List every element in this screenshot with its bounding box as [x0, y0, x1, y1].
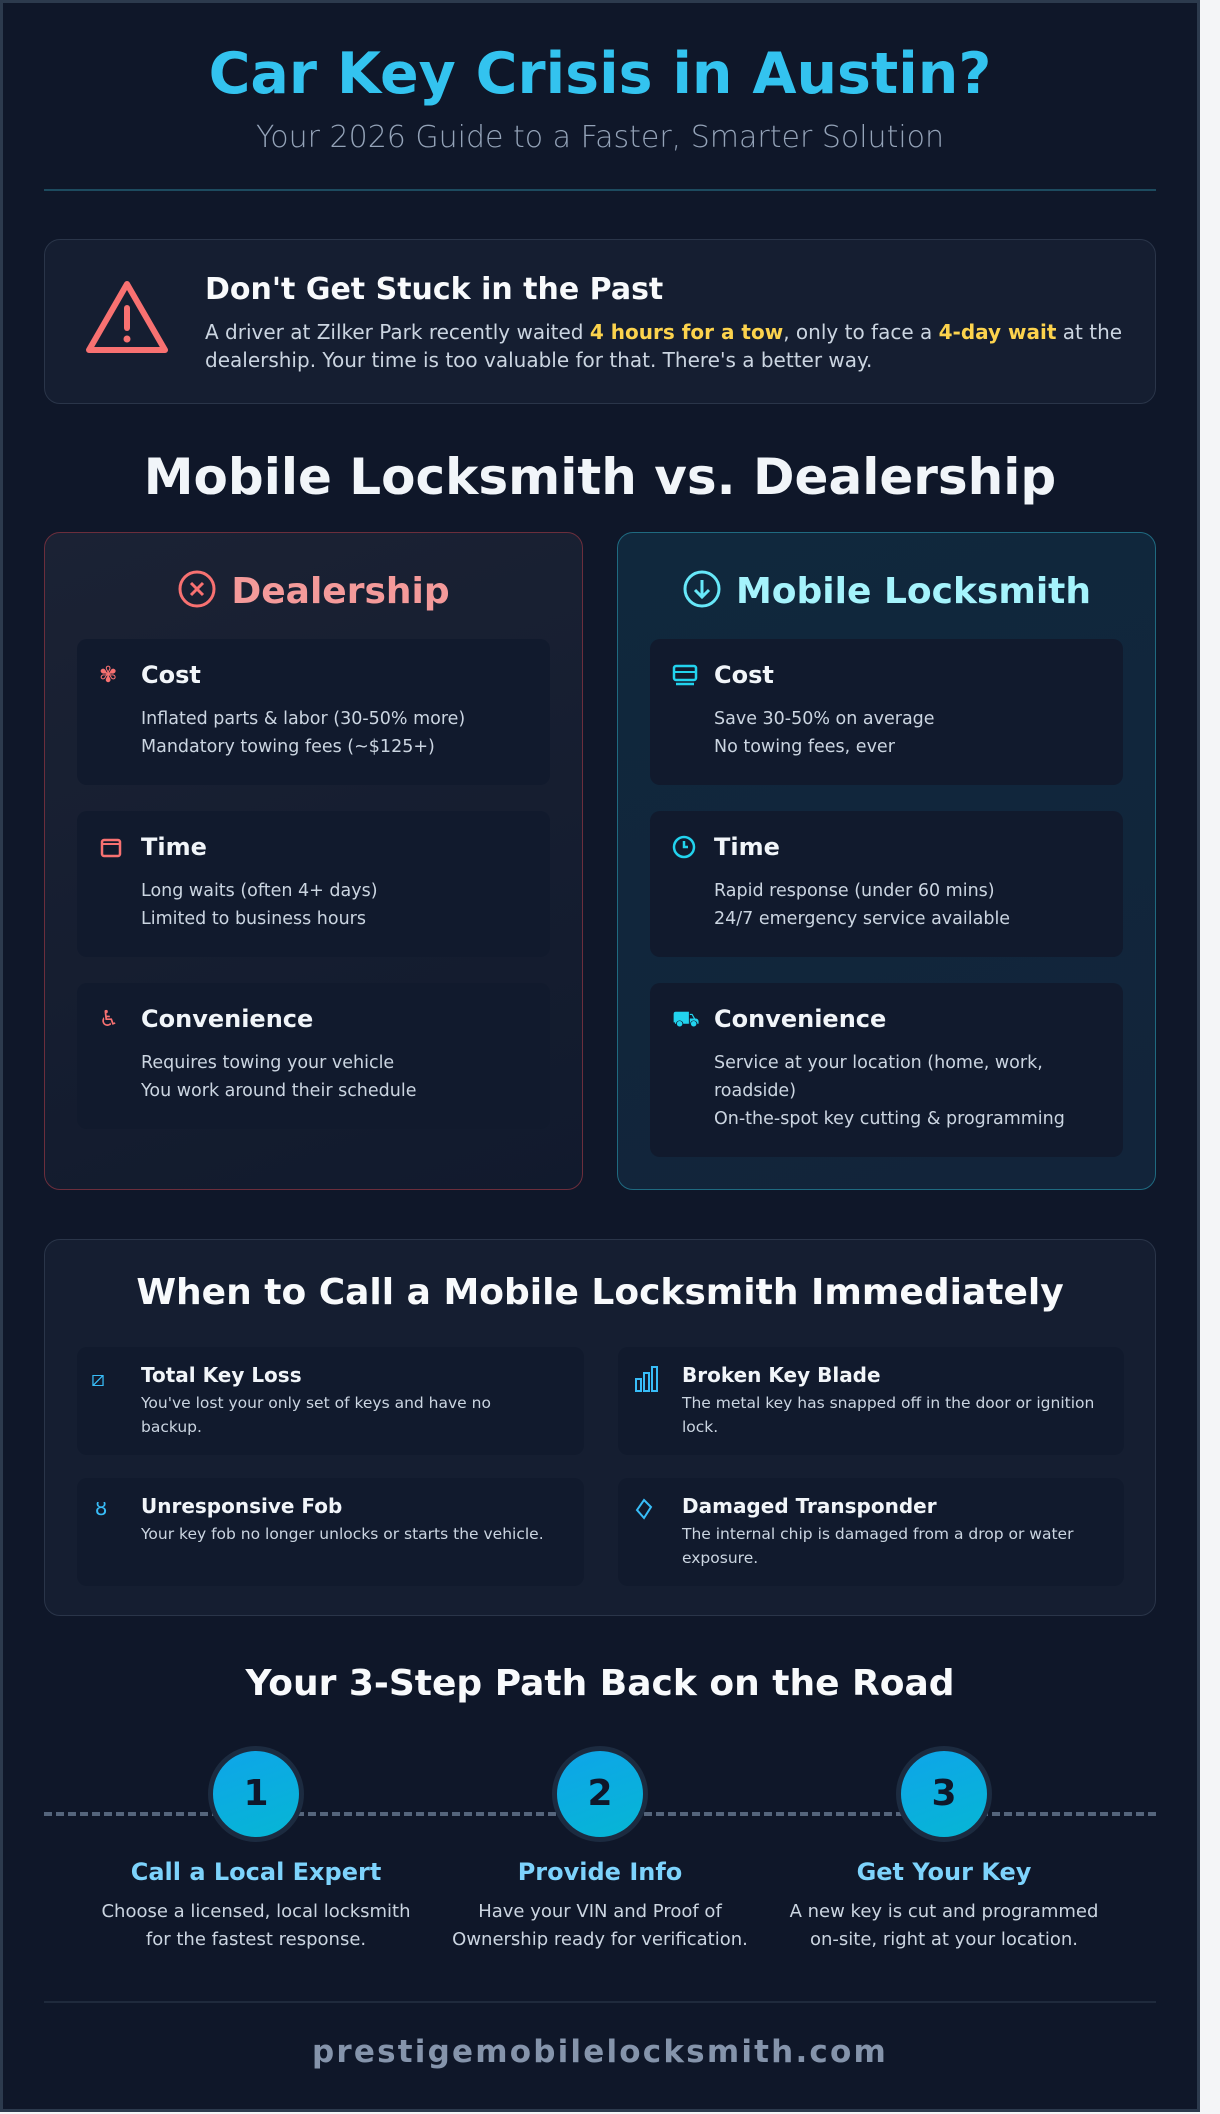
footer url: prestigemobilelocksmith.com — [312, 2034, 888, 2070]
heading: comparison: Mobile Locksmith vs. Dealership — [144, 448, 1056, 506]
panel: dealership — [44, 532, 583, 1190]
card: convenience: Service at your location (home, work, — [714, 1053, 1043, 1073]
item: total key loss: backup. — [141, 1418, 202, 1436]
item: unresponsive fob: Unresponsive Fob — [141, 1494, 342, 1518]
item: broken key blade: The metal key has snapped off in the door or ignition lock. — [682, 1394, 1094, 1436]
text: 2 — [587, 1773, 613, 1814]
card: cost: No towing fees, ever — [714, 737, 895, 757]
card: cost: Save 30-50% on average — [714, 709, 935, 729]
text: 1 — [243, 1773, 269, 1814]
alert heading: Don't Get Stuck in the Past — [205, 272, 663, 307]
card: convenience: ♿ — [99, 1007, 119, 1032]
item: total key loss: ⧄ — [91, 1367, 105, 1392]
card: cost — [650, 639, 1123, 785]
card: time: Time — [141, 833, 207, 861]
alert body: A driver at Zilker Park recently waited 4 hours for a tow, only to face a 4-day wait at the dealership. Your time is too valuable for that. There's a better way. — [205, 320, 1122, 372]
item: total key loss — [77, 1347, 584, 1455]
card: convenience: ⛟ — [672, 1007, 700, 1032]
icon: warning — [86, 281, 168, 353]
card: cost: Cost — [141, 661, 201, 689]
card: time — [77, 811, 550, 957]
step 2 — [452, 1746, 748, 1950]
text: Have your VIN and Proof of Ownership ready for verification. — [452, 1901, 748, 1950]
step 1 — [101, 1746, 410, 1950]
item: damaged transponder: Damaged Transponder — [682, 1494, 937, 1518]
card: convenience: On-the-spot key cutting & programming — [714, 1109, 1065, 1129]
text: A new key is cut and programmed on-site, right at your location. — [790, 1901, 1098, 1950]
item: broken key blade: Broken Key Blade — [682, 1363, 881, 1387]
text: Get Your Key — [857, 1858, 1031, 1886]
text: Call a Local Expert — [131, 1858, 381, 1886]
card: cost — [77, 639, 550, 785]
heading: When to Call a Mobile Locksmith Immediately — [136, 1272, 1064, 1313]
card: time: Rapid response (under 60 mins) — [714, 881, 995, 901]
card: convenience: Convenience — [141, 1005, 313, 1033]
card: convenience — [650, 983, 1123, 1157]
title: Car Key Crisis in Austin? — [209, 41, 991, 107]
item: damaged transponder: The internal chip is damaged from a drop or water exposure. — [682, 1525, 1073, 1567]
item: damaged transponder — [618, 1478, 1124, 1586]
dealership header: Dealership — [231, 571, 450, 612]
card: time: 24/7 emergency service available — [714, 909, 1010, 929]
item: unresponsive fob: ȣ — [95, 1496, 107, 1520]
subtitle: Your 2026 Guide to a Faster, Smarter Solution — [256, 120, 944, 155]
heading: steps: Your 3-Step Path Back on the Road — [245, 1663, 955, 1704]
card: convenience: You work around their schedule — [141, 1081, 416, 1101]
card: convenience — [77, 983, 550, 1129]
item: broken key blade — [618, 1347, 1124, 1455]
text: Choose a licensed, local locksmith for the fastest response. — [101, 1901, 410, 1950]
item: total key loss: Total Key Loss — [141, 1363, 302, 1387]
panel: mobile locksmith — [617, 532, 1156, 1190]
step 3 — [790, 1746, 1098, 1950]
card: time: Time — [714, 833, 780, 861]
card: cost: Inflated parts & labor (30-50% more) — [141, 709, 465, 729]
panel: alert — [44, 239, 1156, 404]
card: time — [650, 811, 1123, 957]
panel: when to call — [44, 1239, 1156, 1616]
card: convenience: roadside) — [714, 1081, 796, 1101]
locksmith header: Mobile Locksmith — [736, 571, 1091, 612]
item: unresponsive fob: Your key fob no longer unlocks or starts the vehicle. — [141, 1525, 544, 1543]
card: cost: Mandatory towing fees (~$125+) — [141, 737, 435, 757]
card: convenience: Convenience — [714, 1005, 886, 1033]
card: convenience: Requires towing your vehicle — [141, 1053, 394, 1073]
text: 3 — [931, 1773, 957, 1814]
card: time: Long waits (often 4+ days) — [141, 881, 378, 901]
text: Provide Info — [518, 1858, 682, 1886]
item: total key loss: You've lost your only set of keys and have no — [141, 1394, 491, 1412]
card: cost: Cost — [714, 661, 774, 689]
card: time: Limited to business hours — [141, 909, 366, 929]
card: cost: ✾ — [99, 663, 117, 688]
item: unresponsive fob — [77, 1478, 584, 1586]
